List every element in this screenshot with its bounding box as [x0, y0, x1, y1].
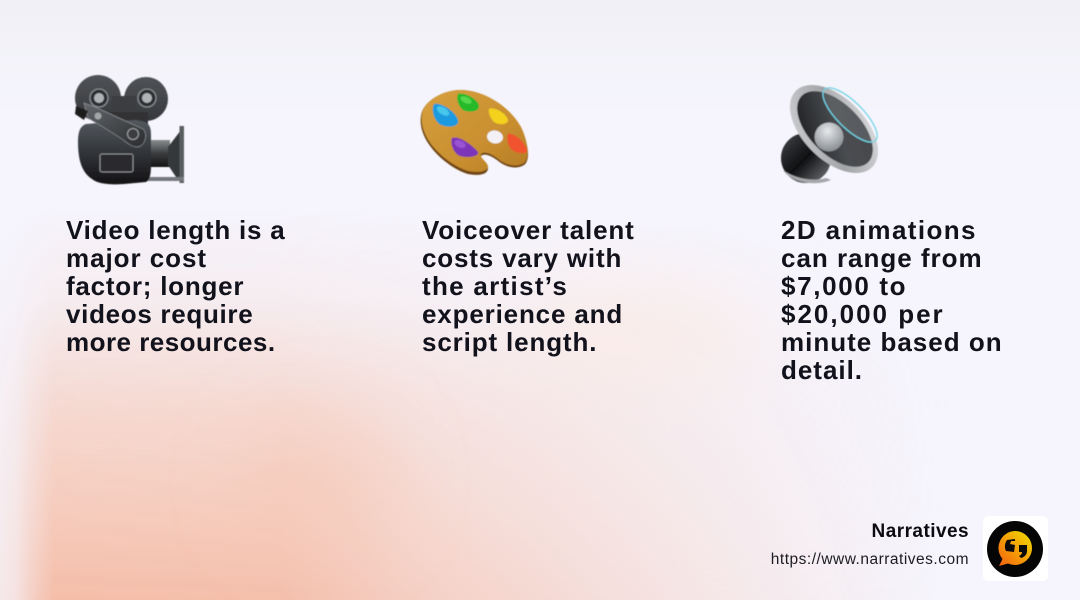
text: video length: Video length is a [66, 215, 286, 245]
text: video length [66, 215, 286, 357]
text: video length: factor; longer [66, 271, 244, 301]
icon: film camera [74, 74, 185, 186]
background gradient [0, 255, 854, 600]
text: video length: major cost [66, 243, 207, 273]
text: voiceover talent [422, 215, 635, 357]
text: 2D animation cost: $20,000 per [781, 299, 945, 329]
text: 2D animation cost: can range from [781, 243, 983, 273]
icon: speaker [780, 84, 878, 184]
text: voiceover talent: the artist’s [422, 271, 568, 301]
logo [983, 516, 1048, 581]
text: voiceover talent: experience and [422, 299, 623, 329]
text: 2D animation cost: detail. [781, 355, 863, 385]
website url: https://www.narratives.com [771, 551, 969, 568]
icon: paint palette [420, 89, 529, 176]
text: video length: videos require [66, 299, 253, 329]
text: voiceover talent: script length. [422, 327, 597, 357]
brand name: Narratives [872, 521, 969, 542]
text: 2D animation cost [781, 215, 1003, 385]
text: video length: more resources. [66, 327, 276, 357]
text: 2D animation cost: $7,000 to [781, 271, 907, 301]
text: voiceover talent: costs vary with [422, 243, 622, 273]
text: 2D animation cost: minute based on [781, 327, 1003, 357]
text: 2D animation cost: 2D animations [781, 215, 977, 245]
text: voiceover talent: Voiceover talent [422, 215, 635, 245]
